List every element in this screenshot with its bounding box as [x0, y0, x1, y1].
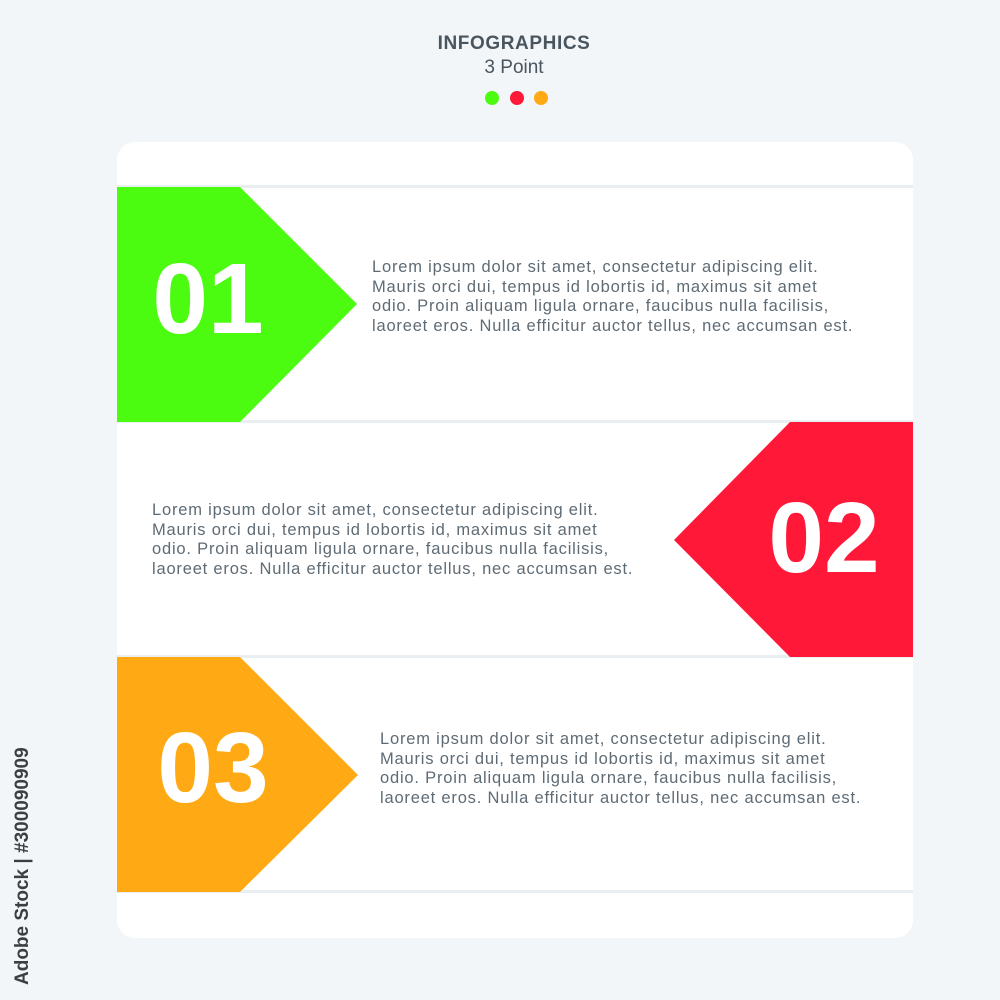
title: INFOGRAPHICS	[438, 33, 590, 54]
arrow 02: 02	[768, 482, 880, 594]
text 03	[380, 730, 861, 806]
text 02: odio. Proin aliquam ligula ornare, faucibus nulla facilisis,	[152, 540, 609, 558]
text 01: Lorem ipsum dolor sit amet, consectetur adipiscing elit.	[372, 258, 818, 276]
arrow 01	[117, 187, 357, 422]
text 01: odio. Proin aliquam ligula ornare, faucibus nulla facilisis,	[372, 297, 829, 315]
text 02: Lorem ipsum dolor sit amet, consectetur adipiscing elit.	[152, 501, 598, 519]
subtitle: 3 Point	[484, 57, 544, 78]
arrow 02	[674, 422, 913, 657]
text 01: Mauris orci dui, tempus id lobortis id, maximus sit amet	[372, 278, 818, 296]
text 03: Lorem ipsum dolor sit amet, consectetur adipiscing elit.	[380, 730, 826, 748]
text 01	[372, 258, 853, 334]
watermark id: Adobe Stock | #300090909	[12, 747, 33, 985]
text 03: laoreet eros. Nulla efficitur auctor tellus, nec accumsan est.	[380, 788, 861, 806]
arrow 01: 01	[152, 243, 264, 355]
text 02	[152, 501, 633, 578]
text 02: Mauris orci dui, tempus id lobortis id, maximus sit amet	[152, 520, 598, 538]
arrow 03	[117, 657, 358, 892]
text 02: laoreet eros. Nulla efficitur auctor tellus, nec accumsan est.	[152, 560, 633, 578]
text 01: laoreet eros. Nulla efficitur auctor tellus, nec accumsan est.	[372, 316, 853, 334]
text 03: Mauris orci dui, tempus id lobortis id, maximus sit amet	[380, 750, 826, 768]
text 03: odio. Proin aliquam ligula ornare, faucibus nulla facilisis,	[380, 769, 837, 787]
arrow 03: 03	[157, 712, 269, 824]
